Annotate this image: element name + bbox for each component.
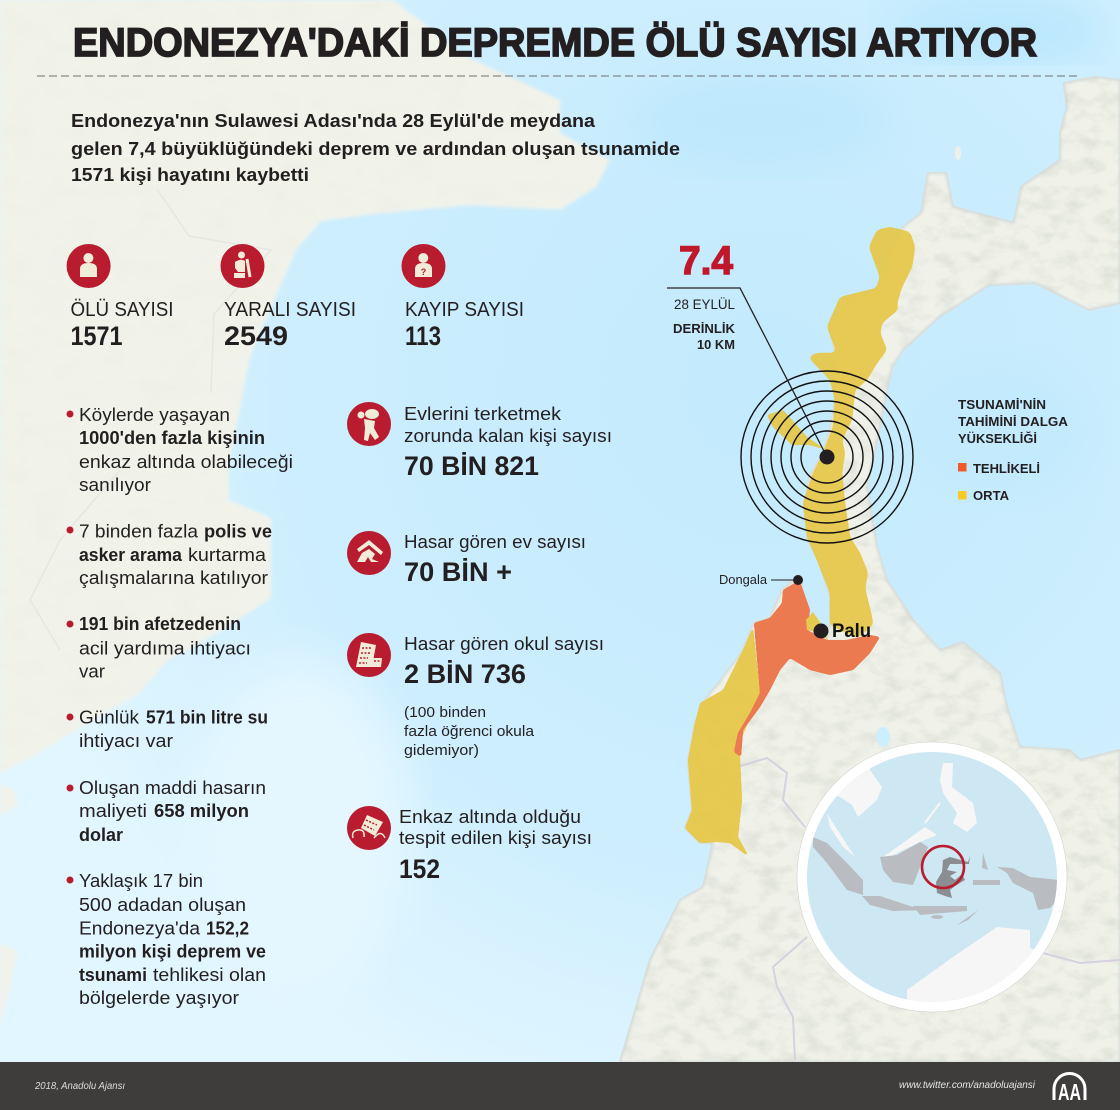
bullet: population at risk: milyon kişi deprem ve (79, 942, 266, 962)
bullet: damage cost: dolar (79, 825, 123, 845)
legend (958, 397, 1069, 503)
bullet: population at risk (66, 871, 266, 1008)
intro text: gelen 7,4 büyüklüğündeki deprem ve ardından oluşan tsunamide (71, 138, 680, 159)
bullet: victims need aid: 191 bin afetzedenin (79, 614, 241, 634)
bullet: water: Günlük (79, 708, 140, 728)
logo: Anadolu Agency (1054, 1074, 1085, 1105)
bullet: population at risk: tehlikesi olan (153, 965, 266, 985)
stat: death toll (67, 244, 174, 351)
bullet: police and soldiers: 7 binden fazla (79, 522, 199, 542)
icon: building in rubble (347, 806, 391, 850)
stat: injured: 2549 (224, 321, 288, 351)
icon: damaged building (347, 633, 391, 677)
bullet: damage cost: maliyeti (79, 801, 147, 821)
stat: displaced: Evlerini terketmek (404, 404, 562, 424)
tsunami areas map (685, 227, 915, 857)
school note: fazla öğrenci okula (404, 724, 535, 740)
bullet: damage cost: 658 milyon (154, 801, 249, 821)
bullet: police and soldiers (66, 522, 272, 588)
stat: death toll: 1571 (70, 321, 122, 351)
medium risk zone, bay head (806, 612, 828, 640)
stat: missing (402, 244, 524, 351)
stat: injured (220, 244, 356, 351)
legend: ORTA (973, 488, 1010, 503)
icon: collapsed house (347, 531, 391, 575)
magnitude callout: 10 KM (697, 337, 735, 352)
epicentre rings (667, 288, 913, 543)
stat: displaced (347, 402, 612, 481)
magnitude callout: 28 EYLÜL (674, 297, 735, 312)
bullet: villages: Köylerde yaşayan (79, 405, 230, 425)
icon: injured person (220, 244, 264, 288)
intro text (71, 110, 680, 185)
footer: www.twitter.com/anadoluajansi (899, 1079, 1036, 1091)
stat: damaged schools: Hasar gören okul sayısı (404, 634, 604, 654)
bullet: police and soldiers: çalışmalarına katılıyor (79, 568, 268, 588)
bullet: police and soldiers: kurtarma (188, 545, 267, 565)
legend: TAHİMİNİ DALGA (958, 414, 1069, 429)
bullet: water: ihtiyacı var (79, 731, 173, 751)
bullet: water (66, 708, 268, 751)
bullet: villages: sanılıyor (79, 475, 151, 495)
bullet: victims need aid: acil yardıma ihtiyacı (79, 638, 251, 658)
medium risk zone, north (803, 227, 915, 638)
stat: under rubble: tespit edilen kişi sayısı (399, 828, 592, 848)
intro text: 1571 kişi hayatını kaybetti (71, 164, 309, 185)
bullet: population at risk: Endonezya'da (79, 918, 201, 938)
bullet: population at risk: tsunami (79, 965, 147, 985)
icon: person (67, 244, 111, 288)
stat: displaced: 70 BİN 821 (404, 451, 539, 481)
bullet: victims need aid (66, 614, 251, 682)
intro text: Endonezya'nın Sulawesi Adası'nda 28 Eylül'de meydana (71, 110, 596, 131)
locator ring (922, 846, 964, 888)
footer (0, 1062, 1120, 1110)
label: Palu (814, 621, 871, 642)
bullet: villages: enkaz altında olabileceği (79, 452, 293, 472)
label: Dongala (719, 573, 803, 587)
bullet: water: 571 bin litre su (146, 708, 268, 728)
stat: damaged schools (347, 633, 604, 759)
bullet: damage cost (66, 778, 266, 845)
bullet: police and soldiers: asker arama (79, 545, 183, 565)
label: Dongala: Dongala (719, 573, 767, 587)
bullet: population at risk: bölgelerde yaşıyor (79, 988, 239, 1008)
logo: Anadolu Agency: AA (1058, 1079, 1081, 1105)
stat: damaged schools: 2 BİN 736 (404, 659, 526, 689)
stat: under rubble: 152 (399, 854, 440, 884)
school note (404, 705, 535, 759)
bullet: villages (66, 405, 293, 495)
stat: under rubble (347, 806, 592, 884)
medium risk zone, bay lobe (767, 410, 826, 450)
bullet: police and soldiers: polis ve (204, 522, 272, 542)
medium risk zone, south (685, 627, 760, 857)
stat: damaged houses: Hasar gören ev sayısı (404, 532, 586, 552)
legend: TEHLİKELİ (973, 461, 1040, 476)
label: Palu: Palu (832, 621, 871, 642)
stat: injured: YARALI SAYISI (224, 299, 356, 321)
bullet list (66, 405, 293, 1008)
school note: (100 binden (404, 705, 486, 721)
stat: death toll: ÖLÜ SAYISI (70, 299, 174, 321)
magnitude callout: DERİNLİK (673, 321, 736, 336)
icon: person carrying load (347, 402, 391, 446)
bullet: villages: 1000'den fazla kişinin (79, 428, 265, 448)
school note: gidemiyor) (404, 743, 479, 759)
footer: 2018, Anadolu Ajansı (34, 1081, 125, 1092)
stat: damaged houses: 70 BİN + (404, 557, 512, 587)
bullet: victims need aid: var (79, 662, 105, 682)
title: ENDONEZYA'DAKİ DEPREMDE ÖLÜ SAYISI ARTIYOR (73, 20, 1037, 65)
stat: missing: 113 (405, 321, 441, 351)
legend: YÜKSEKLİĞİ (958, 431, 1037, 446)
inset locator map (797, 740, 1075, 1020)
magnitude callout (673, 239, 736, 352)
stat: missing: KAYIP SAYISI (405, 299, 524, 321)
legend: TSUNAMİ'NİN (958, 397, 1046, 412)
bullet: population at risk: 152,2 (206, 918, 249, 938)
bullet: population at risk: Yaklaşık 17 bin (79, 871, 203, 891)
bullet: damage cost: Oluşan maddi hasarın (79, 778, 266, 798)
stat: displaced: zorunda kalan kişi sayısı (404, 426, 612, 446)
stat: under rubble: Enkaz altında olduğu (399, 807, 581, 827)
high risk zone (734, 573, 880, 757)
stat: damaged houses (347, 531, 586, 587)
bullet: population at risk: 500 adadan oluşan (79, 895, 246, 915)
magnitude callout: 7.4 (679, 239, 734, 283)
icon: missing person: ? (421, 267, 426, 277)
